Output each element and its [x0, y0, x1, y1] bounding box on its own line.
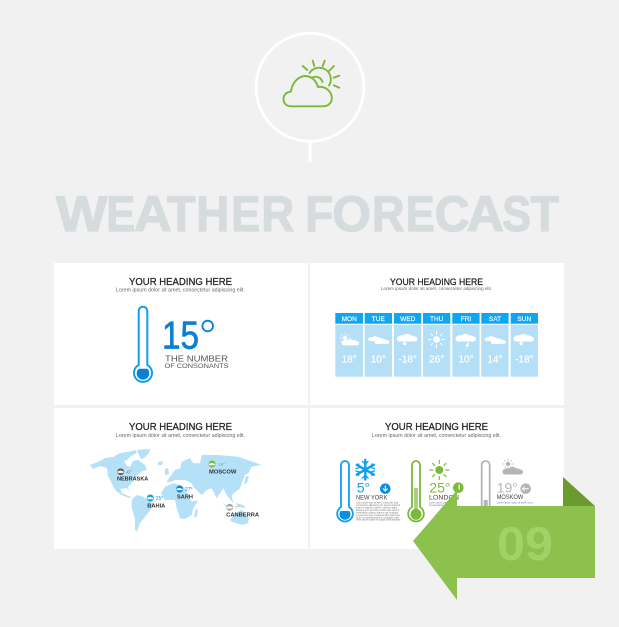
- icon: grey thermometer: [482, 461, 490, 508]
- value: 19°: [497, 480, 518, 496]
- day names: MON: [342, 316, 357, 323]
- text block: [356, 500, 400, 522]
- heading: YOUR HEADING HERE: [390, 277, 483, 288]
- marker: Sarh: [176, 486, 193, 500]
- text block: [429, 500, 457, 507]
- text block: Lorem ipsum dolor sit amet, consectetur adip: [356, 500, 398, 504]
- icon: badge: [520, 483, 531, 494]
- city name: LONDON: [429, 496, 459, 502]
- temperatures: [342, 354, 534, 366]
- text block: exercitation ullamco laboris nisi ut aliquip: [356, 510, 398, 514]
- text block: tempor incididunt ut labore et dolore magna: [356, 506, 397, 510]
- temperatures: -18°: [515, 354, 534, 366]
- title: W: [56, 186, 108, 242]
- title: F: [305, 186, 333, 242]
- arrow: number badge: [413, 477, 595, 600]
- temperatures: 26°: [429, 354, 444, 366]
- temperatures: 18°: [342, 354, 357, 366]
- text block: consectetur adipiscing elit, sed do eiusmod: [356, 503, 400, 507]
- value: 5°: [357, 479, 370, 495]
- icon: green thermometer: [408, 461, 424, 521]
- icon: blue thermometer: [337, 461, 353, 521]
- caption: THE NUMBER: [165, 353, 228, 363]
- icon: thermometer: [134, 307, 152, 382]
- marker: Canberra: [226, 504, 259, 519]
- day names: FRI: [461, 316, 471, 323]
- number: 09: [497, 517, 553, 570]
- title: A: [467, 186, 504, 242]
- world map: [90, 449, 262, 532]
- marker: Sarh: 27°: [185, 487, 193, 493]
- city name: MOSKOW: [497, 495, 524, 501]
- day names: [342, 316, 531, 323]
- column: New York: [337, 460, 400, 522]
- day names: SUN: [517, 316, 531, 323]
- marker: Moscow: MOSCOW: [209, 469, 237, 475]
- heading: YOUR HEADING HERE: [385, 422, 488, 433]
- title: T: [530, 186, 559, 242]
- marker: Sarh: SARH: [177, 494, 193, 500]
- caption: [164, 353, 229, 370]
- marker: Canberra: CANBERRA: [226, 513, 259, 519]
- marker: Nebraska: NEBRASKA: [117, 476, 148, 482]
- marker: Bahia: [147, 494, 165, 509]
- title: O: [332, 186, 371, 242]
- marker: Moscow: [208, 460, 237, 475]
- temperatures: 14°: [487, 354, 503, 366]
- text block: Lorem ipsum dolor sit amet: [429, 500, 457, 504]
- marker: Moscow: 19°: [218, 462, 225, 467]
- title: H: [196, 186, 229, 242]
- text block: dolor in reprehenderit in voluptate velit: [356, 516, 399, 520]
- title: T: [167, 186, 196, 242]
- title: E: [231, 186, 260, 242]
- text block: aliqua ut enim ad minim veniam quis nostrud: [356, 508, 399, 512]
- panel: weekly forecast: [310, 263, 564, 405]
- text block: Lorem ipsum dolor sit amet, consectetur adipiscing elit.: [116, 433, 245, 439]
- text block: Lorem ipsum dolor sit amet, cons: [497, 500, 533, 504]
- weather icons: [340, 331, 534, 349]
- title: A: [134, 186, 172, 242]
- icon: weather badge: [256, 33, 364, 162]
- caption: OF CONSONANTS: [164, 363, 229, 370]
- value: 25°: [429, 479, 450, 495]
- city name: NEW YORK: [356, 496, 387, 502]
- text block: Lorem ipsum dolor sit amet, consectetur adipiscing elit.: [381, 286, 492, 291]
- icon: sun and cloud: [503, 459, 523, 474]
- icon: badge: [380, 483, 391, 494]
- text block: esse cillum dolore eu fugiat nulla pariatur: [356, 518, 400, 522]
- icon: snowflake: [356, 460, 374, 480]
- marker: Nebraska: -6°: [126, 470, 132, 474]
- text block: consectetur adipiscing: [429, 503, 457, 507]
- day names: SAT: [489, 316, 501, 323]
- text block: Lorem ipsum dolor sit amet, consectetur adipiscing elit.: [372, 433, 501, 439]
- temperature value: 15: [162, 314, 199, 357]
- temperatures: -18°: [398, 354, 417, 366]
- marker: Canberra: 7°: [235, 505, 240, 510]
- text block: ex ea commodo consequat duis aute irure: [356, 513, 400, 517]
- panel: world map: [54, 408, 308, 549]
- title: E: [406, 186, 435, 242]
- title: R: [372, 186, 404, 242]
- marker: Bahia: 25°: [156, 496, 163, 502]
- icon: sun: [430, 460, 449, 480]
- temperatures: 10°: [371, 354, 386, 366]
- column: London: [408, 460, 464, 521]
- day names: TUE: [372, 316, 385, 323]
- column: Moskow: [482, 459, 533, 508]
- icon: badge: [453, 482, 464, 493]
- icon: cloud and sun: [284, 61, 339, 106]
- text block: Lorem ipsum dolor sit amet, consectetur adipiscing elit.: [116, 288, 245, 294]
- heading: YOUR HEADING HERE: [129, 277, 232, 288]
- temperatures: 10°: [458, 354, 474, 366]
- heading: YOUR HEADING HERE: [129, 422, 232, 433]
- panel: city thermometers: [310, 408, 564, 549]
- marker: Bahia: BAHIA: [147, 503, 165, 509]
- day names: WED: [400, 316, 416, 323]
- title: R: [261, 186, 294, 242]
- title: E: [106, 186, 135, 242]
- panel: thermometer: [54, 263, 308, 405]
- title: C: [435, 186, 469, 242]
- marker: Nebraska: [117, 468, 148, 482]
- day columns: [335, 313, 538, 377]
- day names: THU: [430, 316, 444, 323]
- title: S: [502, 186, 531, 242]
